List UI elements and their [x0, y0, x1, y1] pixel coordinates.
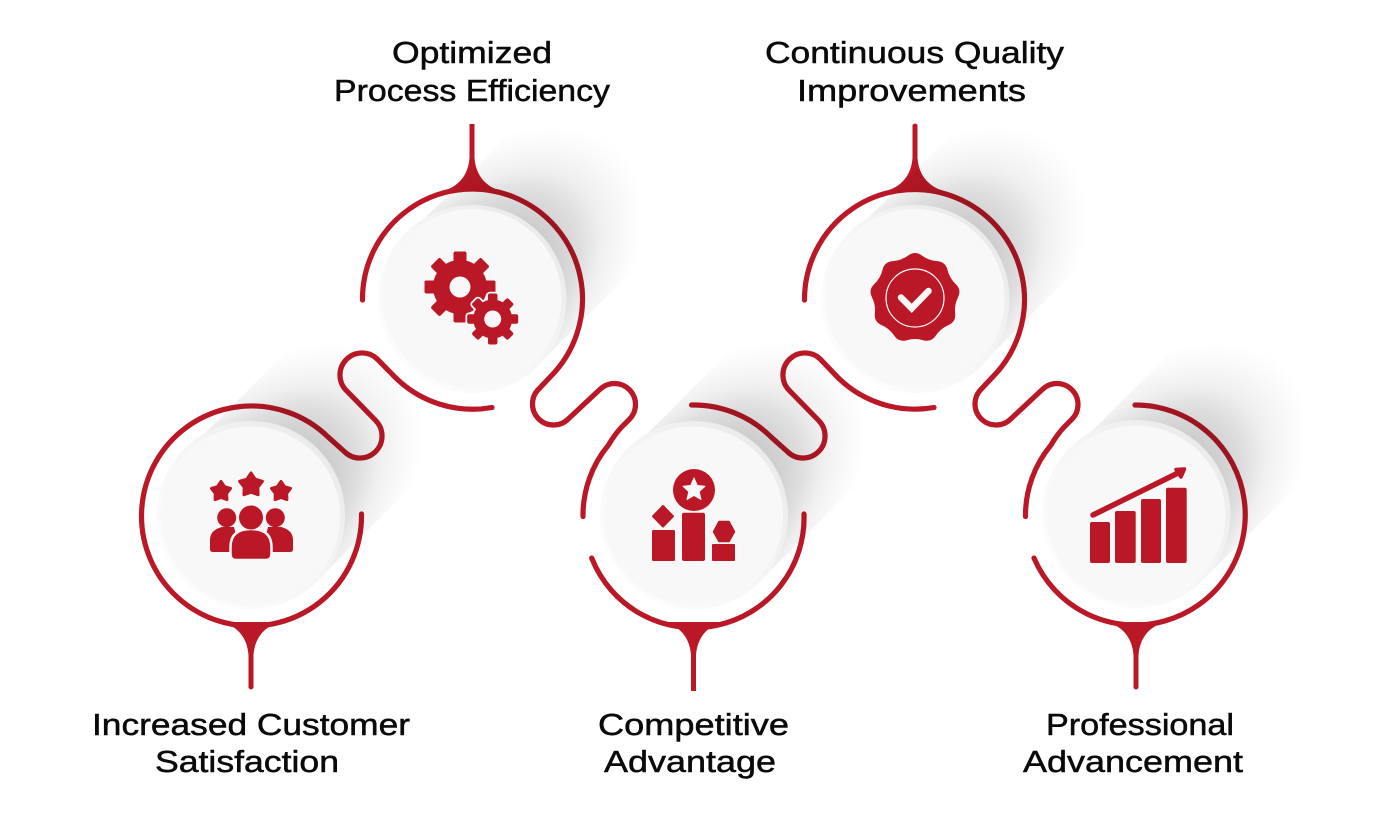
icon: podium with star — [652, 469, 735, 561]
long shadow — [187, 251, 517, 581]
ring segment: circle 2 to circle 3 — [362, 189, 636, 516]
disc face — [826, 209, 1004, 388]
long shadow — [1072, 251, 1399, 581]
stem: circle 4 — [886, 124, 944, 191]
disc face — [1046, 426, 1226, 604]
panel: circle 5 professional advancement — [1042, 251, 1399, 608]
disc — [600, 421, 788, 609]
disc face — [604, 426, 783, 606]
disc — [822, 205, 1010, 393]
panel: circle 3 competitive advantage — [600, 251, 960, 609]
ring segment: circle 3 lower arc — [592, 514, 804, 628]
disc face — [161, 426, 340, 606]
label: competitive advantage — [598, 707, 789, 779]
stem: circle 2 — [443, 124, 501, 191]
disc — [157, 421, 345, 609]
stem: circle 1 — [222, 622, 280, 690]
label: competitive advantage: Advantage — [604, 744, 776, 779]
panel: circle 1 customer satisfaction — [157, 251, 517, 609]
icon: rising bars with arrow — [1090, 469, 1187, 563]
label: professional advancement: Advancement — [1023, 744, 1243, 779]
long shadow — [630, 251, 960, 581]
stem: circle 3 — [664, 622, 722, 691]
label: continuous quality improvements: Improvements — [797, 73, 1026, 108]
label: increased customer satisfaction — [92, 707, 410, 779]
label: professional advancement — [1023, 707, 1243, 779]
icon: gears — [424, 252, 518, 344]
ring segment: circle 5 arc — [1034, 405, 1245, 625]
label: continuous quality improvements: Continuous Quality — [765, 35, 1065, 70]
connecting ribbon line — [142, 124, 1245, 691]
disc — [1042, 420, 1230, 608]
ring segment: circle 4 to circle 5 — [804, 190, 1078, 516]
long shadow — [408, 35, 738, 365]
disc face — [382, 209, 562, 388]
panel: circle 2 process efficiency — [378, 35, 738, 393]
icon: people with stars — [210, 473, 293, 560]
label: increased customer satisfaction: Increased Customer — [92, 707, 410, 742]
icon: quality badge with check — [871, 253, 959, 341]
stem: circle 5 — [1107, 622, 1165, 690]
ring segment: circle 1 to circle 2 — [142, 353, 492, 626]
label: professional advancement: Professional — [1046, 707, 1234, 742]
label: optimized process efficiency — [334, 35, 611, 108]
ring segment: circle 3 to circle 4 — [692, 353, 934, 458]
disc — [378, 205, 566, 393]
label: optimized process efficiency: Optimized — [392, 35, 552, 70]
label: increased customer satisfaction: Satisfaction — [155, 744, 339, 779]
long shadow — [851, 35, 1181, 365]
label: optimized process efficiency: Process Efficiency — [334, 73, 611, 108]
panel: circle 4 quality improvements — [822, 35, 1181, 393]
label: competitive advantage: Competitive — [598, 707, 789, 742]
label: continuous quality improvements — [765, 35, 1065, 108]
